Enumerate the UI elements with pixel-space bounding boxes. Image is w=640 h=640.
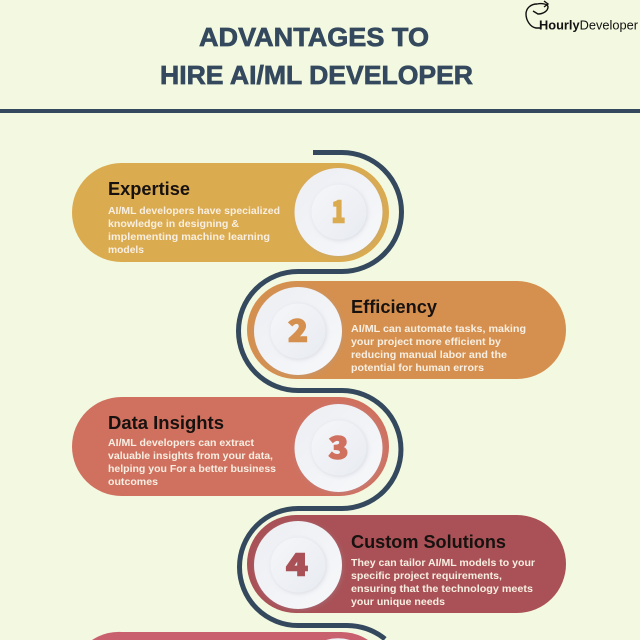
text: efficiency description: reducing manual labor and the xyxy=(351,349,507,361)
badge 1: 1 xyxy=(332,188,346,232)
text: expertise description: models xyxy=(108,244,144,256)
text: efficiency description: potential for human errors xyxy=(351,362,484,374)
logo: HourlyDeveloper xyxy=(526,1,639,32)
badge 3 xyxy=(294,404,382,492)
text: custom solutions description: your unique needs xyxy=(351,596,445,608)
title: HIRE AI/ML DEVELOPER xyxy=(160,60,473,90)
panel: expertise xyxy=(72,163,389,262)
badge 5, cropped at the page edge xyxy=(326,638,350,640)
text: custom solutions description: They can tailor AI/ML models to your xyxy=(351,557,535,569)
heading: custom solutions: Custom Solutions xyxy=(351,532,506,552)
heading: expertise: Expertise xyxy=(108,179,190,199)
badge 3: 3 xyxy=(328,424,348,468)
badge 2: 2 xyxy=(288,306,308,350)
icon: circular arrow xyxy=(526,1,548,28)
text: efficiency description xyxy=(351,323,526,374)
badge 1 xyxy=(294,168,382,256)
text: custom solutions description: ensuring that the technology meets xyxy=(351,583,533,595)
badge 2 xyxy=(254,287,342,375)
badge 4 xyxy=(254,521,342,609)
panel: data insights xyxy=(72,397,389,496)
text: data insights description: helping you For a better business xyxy=(108,463,276,475)
badge 4: 4 xyxy=(286,540,308,584)
text: data insights description: outcomes xyxy=(108,476,158,488)
text: expertise description: implementing machine learning xyxy=(108,231,270,243)
panel: custom solutions xyxy=(247,515,566,613)
text: data insights description: AI/ML developers can extract xyxy=(108,437,254,449)
text: custom solutions description: specific project requirements, xyxy=(351,570,502,582)
heading: efficiency: Efficiency xyxy=(351,297,437,317)
text: efficiency description: your project more efficient by xyxy=(351,336,501,348)
text: expertise description xyxy=(108,205,280,256)
text: efficiency description: AI/ML can automate tasks, making xyxy=(351,323,526,335)
logo: HourlyDeveloper: HourlyDeveloper xyxy=(539,18,639,32)
divider xyxy=(0,109,640,113)
text: expertise description: knowledge in designing & xyxy=(108,218,239,230)
text: data insights description: valuable insights from your data, xyxy=(108,450,273,462)
text: expertise description: AI/ML developers have specialized xyxy=(108,205,280,217)
title: ADVANTAGES TO xyxy=(199,22,429,52)
title xyxy=(160,22,473,90)
text: custom solutions description xyxy=(351,557,535,608)
connector path xyxy=(239,152,402,639)
panel: efficiency xyxy=(247,281,566,379)
panel: fifth step, cropped at the page edge xyxy=(92,632,368,640)
heading: data insights: Data Insights xyxy=(108,413,224,433)
text: data insights description xyxy=(108,437,276,488)
